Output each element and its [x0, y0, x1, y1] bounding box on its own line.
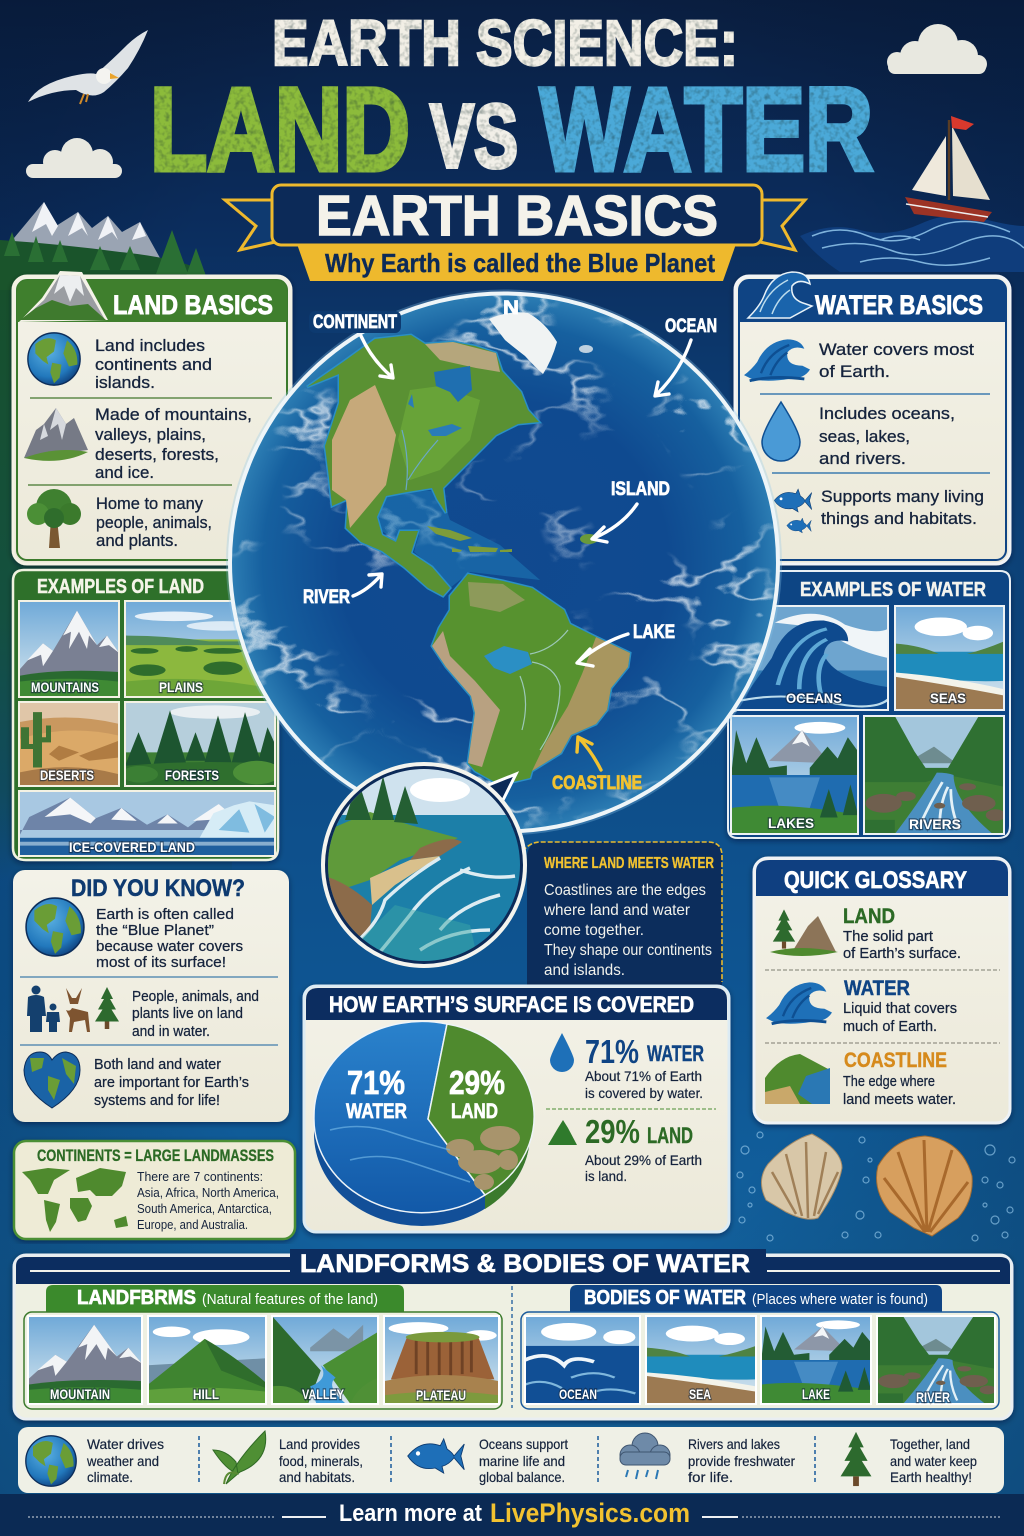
panel: key takeaways strip	[18, 1427, 1004, 1493]
panel: water basics: WATER BASICS	[815, 290, 983, 320]
term: water: WATER	[844, 977, 910, 1000]
image: mountains	[19, 601, 119, 697]
term: coastline	[765, 1049, 956, 1108]
icon: world map	[22, 1168, 128, 1232]
footer	[0, 1494, 1024, 1536]
panel: landforms and bodies of water: LANDFORMS & BODIES OF WATER	[300, 1250, 750, 1278]
image: valley: VALLEY	[302, 1386, 345, 1402]
fact: blue planet	[26, 898, 243, 971]
stat: 71% water: is covered by water.	[585, 1085, 703, 1101]
row: living things: Home to many	[96, 494, 203, 513]
term: coastline: COASTLINE	[844, 1049, 947, 1072]
item: keep earth healthy: Together, land	[890, 1436, 970, 1452]
tab: landforms: LANDFBRMS	[77, 1287, 196, 1309]
image: ocean	[525, 1316, 640, 1404]
item: land provides: Land provides	[279, 1436, 360, 1452]
annotation labels: RIVER	[303, 587, 350, 608]
image: lakes: LAKES	[768, 815, 814, 831]
row: water coverage	[744, 339, 974, 381]
footer: LivePhysics.com	[490, 1498, 690, 1528]
land: greenland	[489, 312, 557, 374]
row: living things: and plants.	[96, 531, 178, 550]
hudson bay and lakes	[434, 366, 472, 402]
pie chart: WATER	[346, 1100, 407, 1123]
term: water: Liquid that covers	[843, 1000, 957, 1017]
image: hill	[148, 1316, 266, 1404]
item: oceans support: global balance.	[479, 1469, 565, 1485]
term: land: of Earth’s surface.	[843, 945, 961, 962]
illustration: seashells and bubbles	[737, 1132, 1015, 1241]
item: freshwater	[620, 1433, 795, 1485]
annotation labels: COASTLINE	[552, 773, 642, 794]
panel: did you know	[13, 870, 289, 1122]
panel: did you know: DID YOU KNOW?	[71, 875, 245, 902]
title: Land vs Water: LAND	[150, 64, 410, 196]
panel: where land meets water	[488, 842, 722, 985]
annotation labels: N	[503, 298, 519, 319]
tab: bodies of water	[570, 1285, 942, 1312]
title: Land vs Water	[150, 64, 873, 196]
icon: header wave	[748, 272, 812, 318]
annotation labels: ISLAND	[611, 479, 670, 500]
item: keep earth healthy	[841, 1432, 977, 1486]
item: freshwater: provide freshwater	[688, 1453, 795, 1469]
image: lake: LAKE	[802, 1386, 830, 1402]
annotation labels: OCEAN	[665, 316, 717, 337]
row: water coverage: of Earth.	[819, 362, 890, 381]
stat: 29% land: 29%	[585, 1113, 640, 1150]
item: water drives climate: weather and	[86, 1453, 159, 1469]
amazon lake and rivers	[484, 646, 532, 674]
stat: 71% water: 71%	[585, 1033, 639, 1070]
land: continents	[307, 335, 630, 785]
row: continents: Land includes	[95, 336, 205, 355]
row: water bodies	[762, 402, 955, 468]
icon: land mountain	[19, 271, 108, 322]
image: ocean: OCEAN	[559, 1386, 597, 1402]
image: hill: HILL	[193, 1386, 219, 1402]
image: oceans: OCEANS	[786, 690, 842, 706]
item: oceans support: Oceans support	[479, 1436, 568, 1452]
panel: where land meets water: where land and water	[543, 902, 691, 919]
image: rivers	[864, 716, 1005, 834]
panel: how earth's surface is covered: HOW EARTH’S SURFACE IS COVERED	[329, 992, 694, 1017]
fact: blue planet: because water covers	[96, 938, 243, 955]
tab: landforms: (Natural features of the land)	[202, 1291, 378, 1308]
fact: people animals plants: plants live on land	[132, 1005, 243, 1022]
panel: where land meets water: WHERE LAND MEETS WATER	[544, 855, 714, 872]
term: water: much of Earth.	[843, 1018, 937, 1035]
term: water	[766, 977, 957, 1035]
ribbon: Earth Basics: EARTH BASICS	[316, 184, 718, 248]
land: north america	[307, 335, 539, 596]
panel: examples of land	[13, 570, 281, 860]
term: land: LAND	[843, 905, 895, 928]
row: landforms: and ice.	[95, 463, 154, 482]
item: freshwater: for life.	[688, 1469, 733, 1485]
image: forests	[122, 702, 281, 786]
tab: landforms	[46, 1285, 404, 1312]
image: seas	[895, 606, 1004, 710]
panel: where land meets water: and islands.	[544, 962, 625, 979]
title: Earth Science: EARTH SCIENCE:	[272, 7, 738, 79]
panel: how earth's surface is covered	[304, 986, 729, 1232]
text: continents list: Asia, Africa, North America,	[137, 1185, 279, 1200]
text: continents list: South America, Antarctica,	[137, 1201, 272, 1216]
panel: land basics: LAND BASICS	[113, 290, 273, 320]
title: Land vs Water: WATER	[540, 64, 873, 196]
item: water drives climate: Water drives	[87, 1436, 164, 1452]
row: habitats: things and habitats.	[821, 509, 977, 528]
icon: cloud top right	[887, 24, 987, 74]
item: oceans support	[408, 1436, 568, 1485]
image: deserts	[19, 702, 119, 786]
ocean currents	[232, 294, 776, 831]
item: land provides: food, minerals,	[279, 1453, 363, 1469]
land: south america	[432, 574, 630, 785]
frame: landform images	[24, 1312, 502, 1409]
tab: bodies of water: (Places where water is found)	[752, 1291, 928, 1308]
panel: land basics	[13, 271, 291, 564]
row: landforms: valleys, plains,	[95, 425, 206, 444]
panel: examples of water	[728, 571, 1010, 838]
annotation labels: CONTINENT	[313, 312, 397, 333]
image: river: RIVER	[916, 1389, 950, 1405]
image: valley	[272, 1316, 378, 1404]
frame: water images	[521, 1312, 999, 1409]
fact: blue planet: most of its surface!	[96, 954, 226, 971]
icon: cloud left	[26, 138, 122, 178]
panel: examples of land: EXAMPLES OF LAND	[37, 576, 204, 598]
image: lakes	[731, 716, 858, 834]
footer: Learn more at	[339, 1500, 482, 1527]
text: continents list: There are 7 continents:	[137, 1169, 263, 1184]
land: caribbean islands	[427, 526, 512, 552]
row: landforms: deserts, forests,	[95, 445, 219, 464]
fact: heart earth: are important for Earth’s	[94, 1074, 249, 1091]
row: water coverage: Water covers most	[819, 340, 974, 359]
illustration: mountains and forest	[0, 202, 206, 290]
term: land: The solid part	[843, 928, 934, 945]
image: river	[877, 1316, 996, 1405]
item: water drives climate	[26, 1436, 164, 1486]
row: habitats: Supports many living	[821, 487, 984, 506]
inset: coastline close-up	[320, 764, 530, 970]
panel: quick glossary	[754, 858, 1010, 1123]
stat: 29% land: LAND	[647, 1123, 693, 1148]
fact: heart earth: Both land and water	[94, 1056, 221, 1073]
icon: seagull	[28, 30, 148, 104]
fact: blue planet: Earth is often called	[96, 906, 234, 923]
image: sea: SEA	[689, 1386, 711, 1402]
image: mountain: MOUNTAIN	[50, 1386, 110, 1402]
image: mountains: MOUNTAINS	[31, 679, 99, 695]
fact: heart earth	[24, 1052, 249, 1109]
globe	[226, 290, 782, 836]
row: continents: islands.	[95, 373, 155, 392]
image: plateau	[384, 1316, 499, 1404]
item: oceans support: marine life and	[479, 1453, 565, 1469]
stat: 29% land: is land.	[585, 1168, 627, 1184]
row: water bodies: and rivers.	[819, 449, 906, 468]
row: continents	[28, 333, 212, 392]
pie chart: 71%	[347, 1064, 405, 1101]
item: keep earth healthy: and water keep	[890, 1453, 977, 1469]
tab: bodies of water: BODIES OF WATER	[584, 1287, 746, 1309]
pie chart: 29%	[449, 1064, 505, 1101]
shallow gulf and caribbean	[377, 490, 540, 588]
row: water bodies: Includes oceans,	[819, 404, 955, 423]
pie chart: LAND	[451, 1100, 498, 1123]
image: oceans	[735, 606, 888, 710]
stat: 71% water: WATER	[647, 1041, 704, 1066]
row: continents: continents and	[95, 355, 212, 374]
item: land provides	[213, 1431, 363, 1485]
fact: blue planet: the “Blue Planet”	[96, 922, 214, 939]
image: plains	[125, 601, 265, 697]
term: land	[770, 905, 961, 962]
item: freshwater: Rivers and lakes	[688, 1436, 780, 1452]
subtitle banner: Why Earth is called the Blue Planet	[325, 248, 715, 278]
image: forests: FORESTS	[165, 767, 219, 783]
term: coastline: The edge where	[843, 1073, 935, 1090]
image: rivers: RIVERS	[909, 816, 961, 832]
image: lake	[761, 1316, 871, 1404]
panel: continents: CONTINENTS = LARGE LANDMASSES	[37, 1146, 274, 1165]
text: continents list	[137, 1169, 279, 1232]
item: water drives climate: climate.	[87, 1469, 133, 1485]
fact: heart earth: systems and for life!	[94, 1092, 220, 1109]
fact: people animals plants: and in water.	[132, 1023, 210, 1040]
fact: people animals plants: People, animals, and	[132, 988, 259, 1005]
panel: examples of water: EXAMPLES OF WATER	[800, 579, 986, 601]
row: living things: people, animals,	[96, 513, 212, 532]
text: continents list: Europe, and Australia.	[137, 1217, 248, 1232]
row: habitats	[774, 487, 984, 533]
item: keep earth healthy: Earth healthy!	[890, 1469, 972, 1485]
panel: continents	[14, 1141, 295, 1239]
image: plateau: PLATEAU	[416, 1387, 466, 1403]
stat: 29% land	[548, 1113, 702, 1184]
image: seas: SEAS	[930, 690, 966, 706]
stat: 71% water: About 71% of Earth	[585, 1068, 702, 1084]
row: living things	[27, 489, 212, 550]
image: plains: PLAINS	[159, 679, 203, 695]
title: Land vs Water: VS	[430, 87, 518, 187]
illustration: sailboat and waves	[800, 116, 1024, 272]
annotation labels: LAKE	[633, 622, 675, 643]
image: sea	[646, 1316, 756, 1404]
pie chart	[314, 1021, 534, 1226]
image: ice-covered land: ICE-COVERED LAND	[69, 839, 195, 855]
panel: where land meets water: come together.	[544, 922, 644, 939]
stat: 29% land: About 29% of Earth	[585, 1152, 702, 1168]
panel: landforms and bodies of water	[14, 1249, 1012, 1419]
panel: where land meets water: Coastlines are the edges	[544, 882, 706, 899]
panel: where land meets water: They shape our continents	[544, 942, 712, 959]
image: deserts: DESERTS	[40, 767, 94, 783]
row: landforms: Made of mountains,	[95, 405, 252, 424]
image: mountain	[28, 1316, 142, 1404]
panel: water basics	[735, 272, 1010, 564]
item: land provides: and habitats.	[279, 1469, 355, 1485]
row: water bodies: seas, lakes,	[819, 427, 910, 446]
term: coastline: land meets water.	[843, 1091, 956, 1108]
image: ice-covered land	[19, 791, 275, 856]
stat: 71% water	[550, 1033, 704, 1101]
land: island	[580, 534, 598, 544]
panel: quick glossary: QUICK GLOSSARY	[784, 867, 967, 894]
fact: people animals plants	[27, 986, 259, 1040]
arrows	[353, 336, 691, 770]
row: landforms	[24, 405, 252, 482]
annotation labels	[303, 298, 717, 794]
